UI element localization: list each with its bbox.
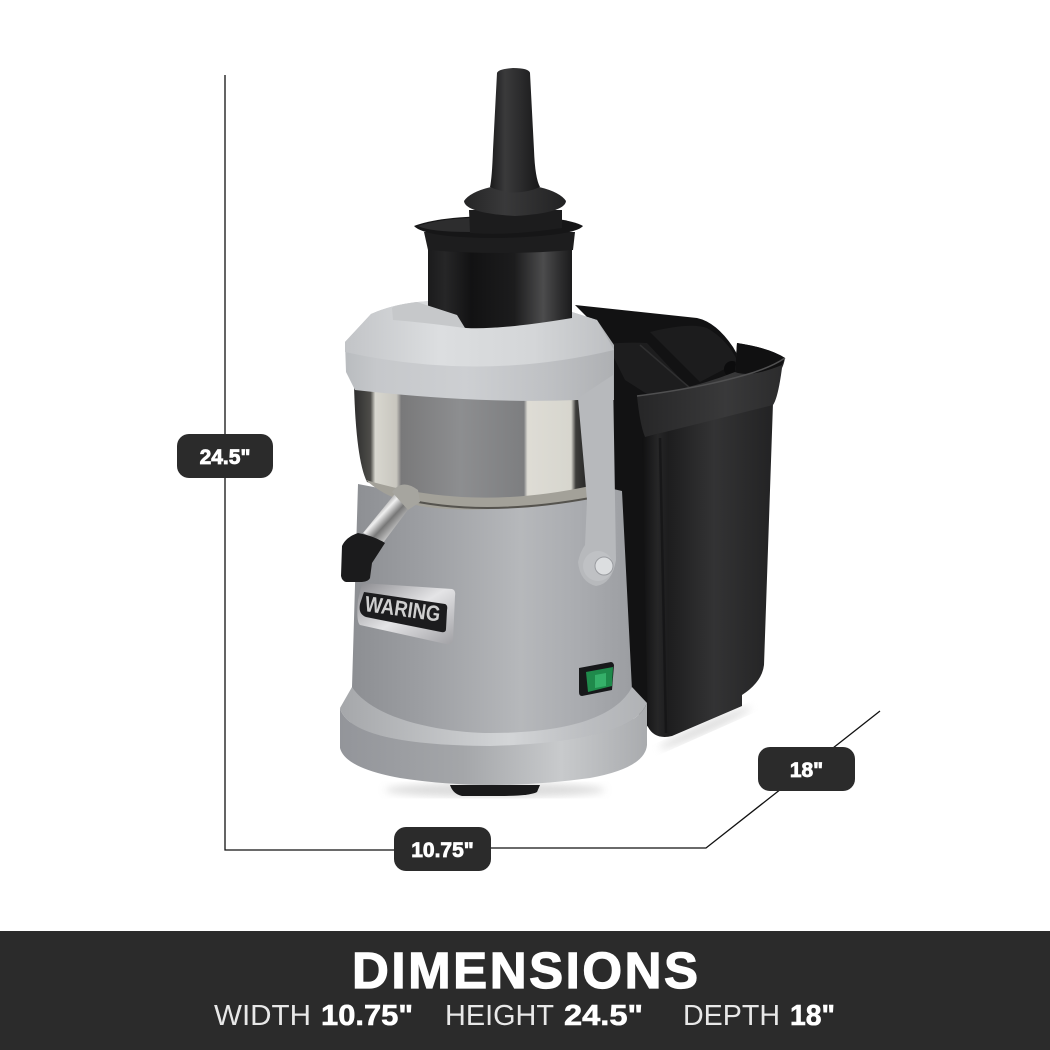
pulp bin housing <box>575 305 745 727</box>
heading: dimensions: DIMENSIONS <box>352 942 698 999</box>
label: height 24.5: 24.5" <box>200 446 250 469</box>
summary line: HEIGHT <box>445 1000 554 1032</box>
summary line <box>214 1000 835 1032</box>
rubber foot <box>450 785 540 796</box>
juice spout <box>341 484 420 582</box>
label: height 24.5 <box>177 434 273 478</box>
label: width 10.75: 10.75" <box>411 839 474 862</box>
Waring badge: WARING <box>363 591 442 627</box>
top housing <box>345 301 614 401</box>
lid plate <box>392 302 465 328</box>
base ring <box>340 687 647 785</box>
footer band <box>0 931 1050 1050</box>
juicer product illustration <box>340 68 785 797</box>
Waring badge <box>357 583 455 644</box>
label: depth 18: 18" <box>790 759 823 782</box>
summary line: 18" <box>790 1000 835 1032</box>
summary line: DEPTH <box>683 1000 780 1032</box>
base body <box>350 484 634 735</box>
pivot bolt <box>583 551 613 581</box>
stainless steel bowl <box>354 385 590 510</box>
summary line: 24.5" <box>564 1000 643 1032</box>
vertical dimension line: height <box>225 75 395 850</box>
pulp bin <box>637 343 785 737</box>
feed chute <box>414 216 583 328</box>
label: depth 18 <box>758 747 855 791</box>
summary line: WIDTH <box>214 1000 311 1032</box>
food pusher <box>464 68 566 234</box>
power switch <box>579 662 614 696</box>
depth dimension line <box>490 711 880 848</box>
juicer arm <box>578 375 616 586</box>
label: width 10.75 <box>394 827 491 871</box>
summary line: 10.75" <box>321 1000 413 1032</box>
